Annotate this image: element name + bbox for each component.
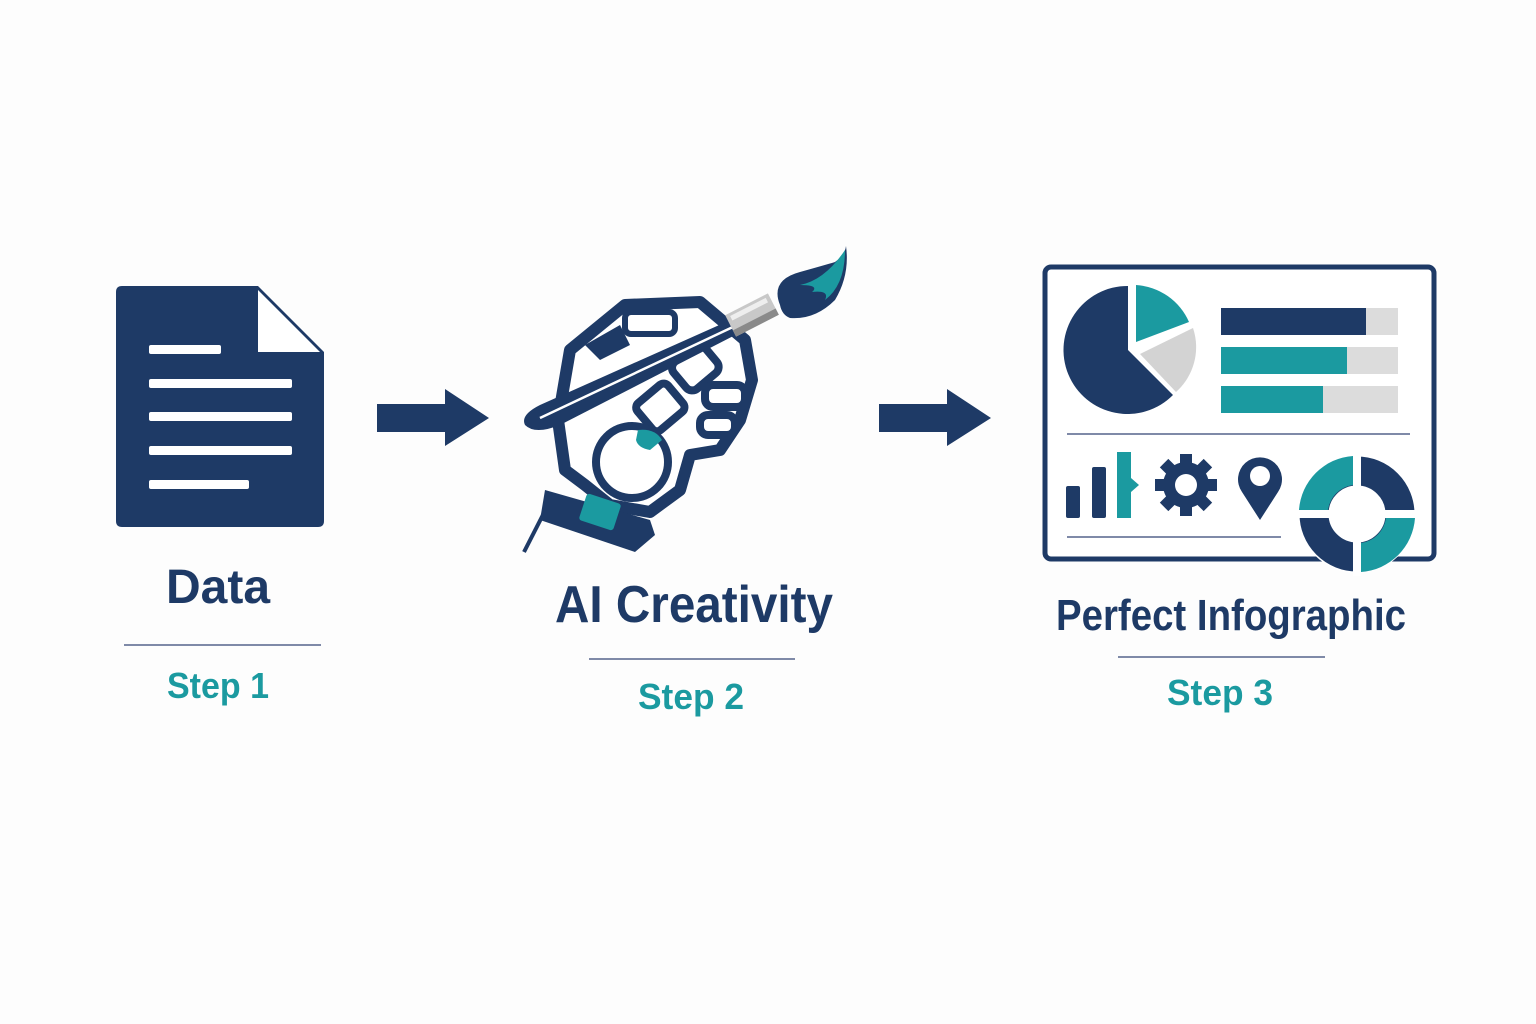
heading: Perfect Infographic: Perfect Infographic	[1056, 591, 1406, 640]
step label: Step 1: Step 1	[167, 665, 269, 706]
heading: Data: Data	[166, 561, 270, 614]
icon: hand holding paintbrush	[524, 246, 847, 552]
step label: Step 2: Step 2	[638, 676, 744, 717]
step label: Step 3: Step 3	[1167, 672, 1273, 713]
heading: AI Creativity: AI Creativity	[555, 576, 833, 634]
icon: data document	[116, 286, 324, 527]
donut chart	[1295, 452, 1419, 576]
arrow: step 1 to 2	[377, 389, 489, 446]
icon: location pin	[1238, 457, 1282, 520]
icon: gear	[1155, 454, 1217, 516]
mini column chart	[1066, 452, 1139, 518]
bar chart	[1221, 308, 1398, 413]
arrow: step 2 to 3	[879, 389, 991, 446]
pie chart	[1063, 285, 1196, 414]
icon: infographic dashboard	[1045, 267, 1434, 576]
